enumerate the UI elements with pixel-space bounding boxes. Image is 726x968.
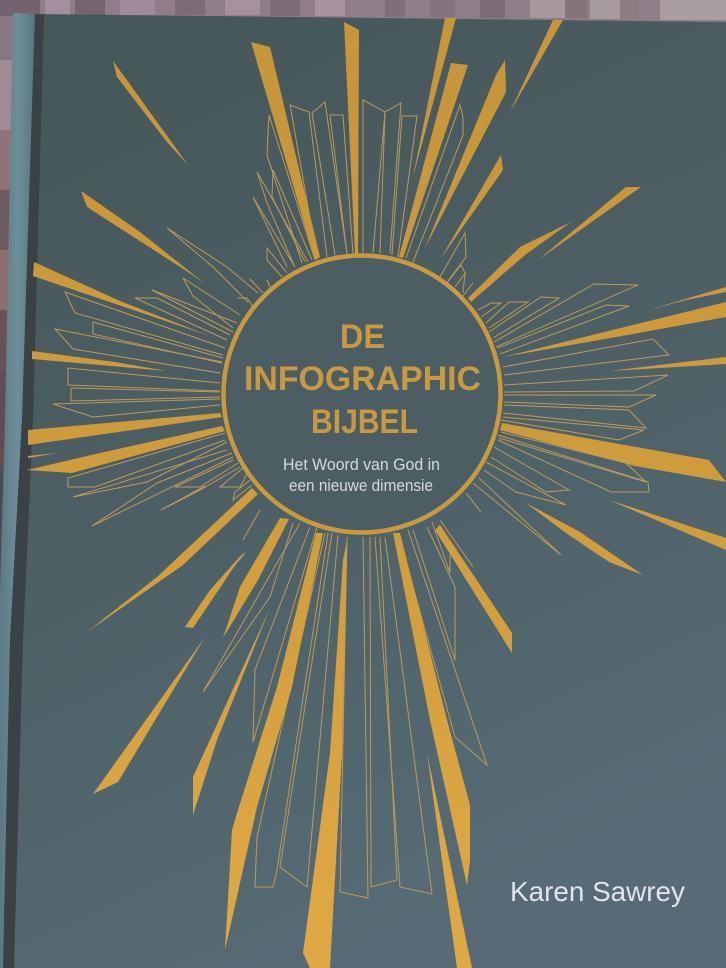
author name: Karen Sawrey [510, 876, 685, 907]
tablecloth background [0, 0, 726, 600]
subtitle: een nieuwe dimensie [289, 477, 433, 495]
central medallion ring [224, 256, 500, 532]
book spine [0, 13, 35, 968]
subtitle: Het Woord van God in [283, 456, 440, 474]
title: BIJBEL [311, 403, 418, 441]
title [244, 318, 481, 441]
sunburst outline rays [53, 100, 669, 898]
title: DE [340, 318, 385, 356]
subtitle [283, 456, 440, 495]
title: INFOGRAPHIC [244, 360, 481, 398]
hinge groove [3, 14, 44, 968]
